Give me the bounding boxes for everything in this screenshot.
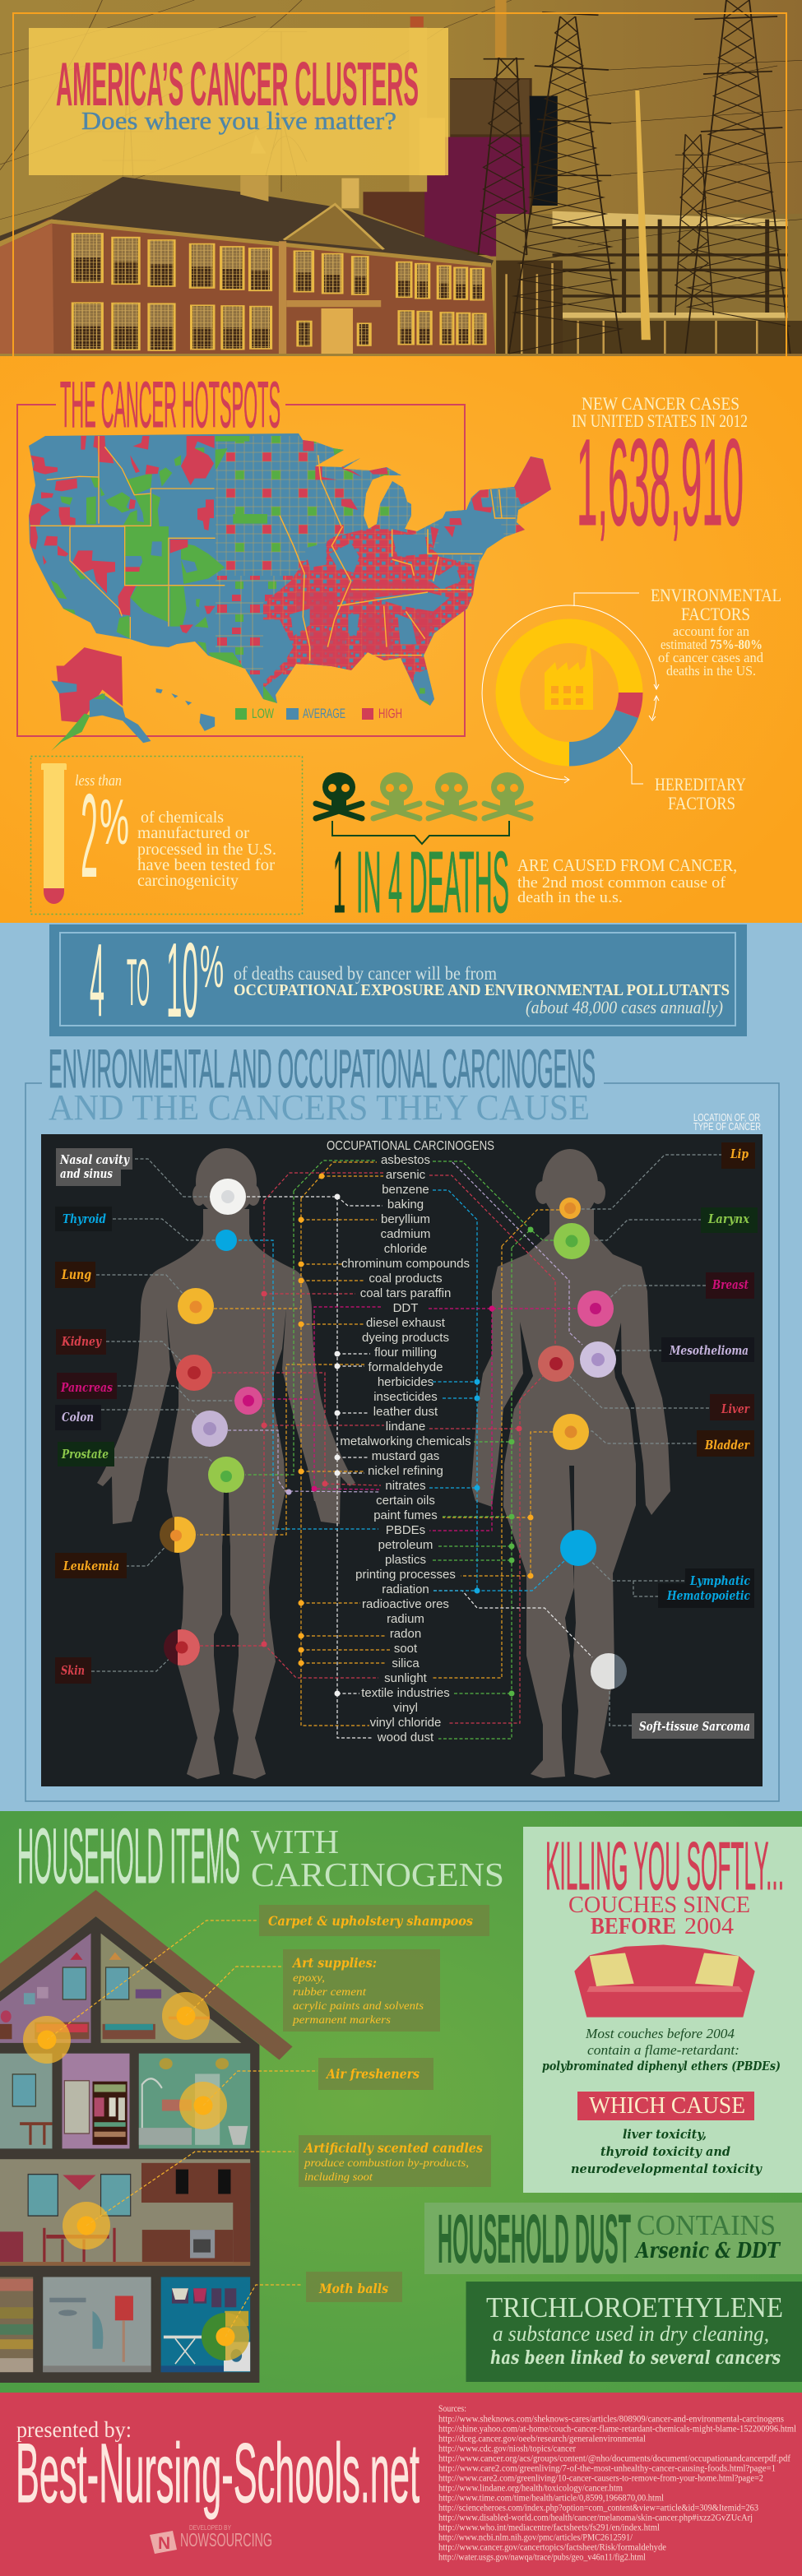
new cancer cases stat: IN UNITED STATES IN 2012: [572, 410, 748, 431]
right cancer labels: Lip: [730, 1147, 749, 1161]
sources list: http://www.care2.com/greenliving/7-of-the-most-unhealthy-cancer-causing-foods.html?page=1: [438, 2463, 776, 2473]
right cancer labels: Soft-tissue Sarcoma: [639, 1719, 750, 1734]
callout: 2% of chemicals tested: less than: [75, 772, 122, 790]
sources list: http://www.cancer.gov/cancertopics/factsheet/Risk/formaldehyde: [438, 2543, 666, 2553]
panel: killing you softly: thyroid toxicity and: [600, 2144, 730, 2159]
callout: 2% of chemicals tested: have been tested for: [137, 856, 275, 874]
1 in 4 deaths: death in the u.s.: [517, 889, 623, 906]
left cancer labels: Skin: [61, 1663, 85, 1678]
occupational carcinogens list: mustard gas: [372, 1449, 439, 1463]
map legend: AVERAGE: [303, 706, 345, 721]
right cancer labels: Breast: [712, 1277, 749, 1292]
icon: light skull: [484, 772, 531, 818]
label: art supplies: acrylic paints and solvents: [293, 2000, 424, 2013]
label: carpet shampoos: [259, 1905, 489, 1936]
panel: killing you softly: contain a flame-retardant:: [587, 2042, 739, 2058]
label: moth balls: Moth balls: [318, 2281, 388, 2296]
east counties: [263, 440, 551, 706]
location label: LOCATION OF, OR: [693, 1111, 760, 1124]
occupational carcinogens list: vinyl chloride: [370, 1716, 441, 1730]
banner: 4 to 10%: 10: [166, 921, 198, 1040]
occupational carcinogens list: lindane: [386, 1420, 425, 1434]
occupational carcinogens list: nitrates: [385, 1479, 426, 1493]
subtitle: Does where you live matter?: [81, 106, 396, 135]
occupational carcinogens list: wood dust: [377, 1730, 434, 1744]
panel: household dust: CONTAINS: [637, 2209, 776, 2241]
first floor: [28, 2175, 58, 2216]
occupational carcinogens list: textile industries: [361, 1686, 450, 1700]
map legend: LOW: [252, 706, 274, 721]
occupational carcinogens list: metalworking chemicals: [340, 1434, 471, 1448]
panel: trichloroethylene: a substance used in dry cleaning,: [493, 2322, 769, 2346]
sources list: http://dceg.cancer.gov/oeeb/research/generalenvironmental: [438, 2434, 646, 2444]
occupational carcinogens list: herbicides: [378, 1375, 433, 1389]
occupational carcinogens list: paint fumes: [373, 1508, 438, 1522]
sources list: Sources:: [438, 2404, 466, 2414]
occupational carcinogens list: coal tars paraffin: [360, 1286, 451, 1300]
environmental factors text: [651, 585, 781, 679]
cancer location circles, male: [160, 1179, 262, 1668]
right cancer labels: Mesothelioma: [669, 1343, 749, 1358]
household heading: CARCINOGENS: [251, 1856, 504, 1893]
title box: [29, 28, 448, 175]
panel: trichloroethylene: TRICHLOROETHYLENE: [486, 2291, 783, 2323]
occupational carcinogens list: silica: [392, 1656, 420, 1670]
map legend: [235, 706, 402, 721]
developer logo: N: [158, 2534, 170, 2553]
callout: 2% of chemicals tested: processed in the U.S.: [137, 841, 276, 859]
occupational carcinogens list: beryllium: [381, 1212, 430, 1226]
occupational carcinogens list: baking: [387, 1198, 424, 1212]
banner: 4 to 10%: 4: [90, 922, 104, 1038]
left cancer labels: Thyroid: [63, 1212, 106, 1226]
panel: killing you softly: WHICH CAUSE: [589, 2092, 745, 2119]
occupational carcinogens list: coal products: [369, 1272, 443, 1286]
left cancer labels: and sinus: [60, 1166, 113, 1181]
right cancer labels: Larynx: [707, 1212, 750, 1226]
occupational carcinogens list: DDT: [393, 1301, 418, 1315]
left cancer labels: [55, 1148, 132, 1684]
section: household items (green): [0, 1811, 802, 2393]
1 in 4 deaths: ARE CAUSED FROM CANCER,: [517, 855, 737, 875]
sources list: http://water.usgs.gov/nawqa/trace/pubs/geo_v46n11/fig2.html: [438, 2553, 646, 2563]
label: art supplies: epoxy,: [293, 1972, 325, 1985]
male figure: [97, 1148, 355, 1779]
icon: dark skull: [316, 772, 362, 818]
occupational carcinogens list: vinyl: [393, 1701, 418, 1715]
occupational carcinogens list: petroleum: [378, 1538, 433, 1552]
callout: 2% of chemicals tested: carcinogenicity: [137, 872, 239, 890]
sources list: http://www.sheknows.com/sheknows-cares/articles/808909/cancer-and-environmental-carcinogens: [438, 2414, 784, 2424]
occupational carcinogens list: diesel exhaust: [366, 1316, 446, 1330]
sources list: http://www.who.int/mediacentre/factsheets/fs291/en/index.html: [438, 2523, 660, 2533]
label: scented candles: Artificially scented candles: [303, 2140, 483, 2156]
1 in 4 deaths: the 2nd most common cause of: [517, 874, 726, 892]
presented by: presented by:: [16, 2417, 132, 2442]
Alaska: [51, 647, 215, 751]
map legend: HIGH: [378, 706, 402, 721]
sources list: http://www.care2.com/greenliving/10-cancer-causers-to-remove-from-your-home.html?page=2: [438, 2474, 763, 2484]
left cancer labels: Kidney: [61, 1334, 102, 1349]
occupational carcinogens list: radon: [390, 1627, 421, 1641]
hero panel: photo collage with title: [0, 0, 802, 367]
section: carcinogens (blue): [0, 921, 802, 1811]
occupational carcinogens list: cadmium: [381, 1227, 430, 1241]
occupational carcinogens list: radiation: [382, 1582, 429, 1596]
1 in 4 deaths: 1: [333, 834, 345, 931]
right cancer labels: Lymphatic: [689, 1573, 750, 1588]
sources list: http://www.ncbi.nlm.nih.gov/pmc/articles/PMC2612591/: [438, 2533, 633, 2543]
developer logo: NOWSOURCING: [180, 2529, 272, 2551]
occupational carcinogens list: radium: [387, 1612, 424, 1626]
pylons: [478, 0, 802, 354]
right cancer labels: Hematopoietic: [666, 1588, 750, 1603]
occupational carcinogens list: leather dust: [373, 1405, 438, 1419]
icon: test tube: [41, 763, 67, 904]
section: footer (red): [0, 2393, 802, 2576]
occupational carcinogens list: soot: [394, 1642, 418, 1656]
label: scented candles: [299, 2135, 491, 2187]
hereditary factors text: HEREDITARY: [655, 774, 746, 795]
icon: light skull: [429, 772, 475, 818]
panel: killing you softly: 2004: [684, 1913, 735, 1939]
developer logo: DEVELOPED BY: [189, 2524, 232, 2532]
US county map: [16, 428, 559, 751]
banner: 4 to 10%: [49, 921, 747, 1040]
label: art supplies: Art supplies:: [291, 1955, 377, 1971]
environmental factors text: FACTORS: [681, 604, 750, 624]
carcinogen connector lines: [91, 1155, 722, 1739]
occupational carcinogens list: sunlight: [384, 1671, 428, 1685]
illustration: house cross-section: [0, 1890, 293, 2383]
1 in 4 deaths: [316, 772, 737, 931]
occupational carcinogens list: insecticides: [373, 1390, 438, 1404]
callout: 2% of chemicals tested: [31, 757, 303, 915]
sources list: http://www.lindane.org/health/toxicology/cancer.htm: [438, 2484, 623, 2494]
cancer location circles, female: [538, 1198, 627, 1691]
callout: 2% of chemicals tested: %: [100, 785, 129, 858]
label: air fresheners: Air fresheners: [325, 2066, 420, 2082]
developer logo: [150, 2524, 272, 2554]
panel: killing you softly: BEFORE: [591, 1913, 676, 1939]
hereditary factors text: [655, 774, 746, 813]
panel: killing you softly: liver toxicity,: [623, 2127, 707, 2142]
environmental factors text: deaths in the US.: [666, 663, 756, 679]
left cancer labels: Pancreas: [60, 1380, 113, 1395]
occupational carcinogens list: benzene: [382, 1183, 429, 1197]
label: carpet shampoos: Carpet & upholstery shampoos: [268, 1913, 473, 1929]
banner: 4 to 10%: %: [200, 934, 224, 1000]
sources list: http://scienceheroes.com/index.php?option=com_content&view=article&id=309&Itemid=263: [438, 2504, 758, 2513]
new cancer cases stat: [572, 393, 748, 551]
new cancer cases stat: NEW CANCER CASES: [582, 393, 739, 414]
panel: killing you softly: [523, 1827, 802, 2193]
callout: 2% of chemicals tested: 2: [81, 769, 98, 902]
environmental factors text: ENVIRONMENTAL: [651, 585, 781, 605]
icon: couch: [574, 1944, 755, 2018]
occupational carcinogens list: printing processes: [355, 1568, 456, 1582]
left cancer labels: Nasal cavity: [59, 1152, 130, 1167]
household heading: WITH: [251, 1823, 339, 1860]
left cancer labels: Lung: [61, 1267, 91, 1282]
occupational carcinogens list: arsenic: [386, 1168, 426, 1182]
which cause box: [577, 2092, 754, 2120]
label: moth balls: [306, 2272, 402, 2302]
household heading: HOUSEHOLD ITEMS: [17, 1813, 240, 1900]
female figure: [471, 1149, 670, 1778]
occupational carcinogens list: radioactive ores: [362, 1597, 449, 1611]
substation: [496, 214, 802, 354]
Hawaii: [156, 688, 215, 731]
section heading: [49, 1039, 596, 1128]
sources list: http://www.cdc.gov/niosh/topics/cancer: [438, 2444, 576, 2453]
section: the cancer hotspots (orange): [0, 356, 802, 931]
attic furniture: [63, 1967, 86, 1999]
household heading: [17, 1813, 504, 1900]
label: scented candles: including soot: [304, 2171, 373, 2184]
carcinogen connector nodes: [262, 1173, 533, 1696]
label: art supplies: rubber cement: [293, 1986, 367, 1999]
environmental factors text: of cancer cases and: [658, 650, 763, 665]
occupational carcinogens list: chloride: [384, 1242, 427, 1256]
sources list: [438, 2404, 796, 2563]
occupational carcinogens list: flour milling: [374, 1346, 437, 1360]
sources list: http://www.time.com/time/health/article/0,8599,1966870,00.html: [438, 2494, 664, 2504]
icon: factory: [545, 646, 593, 710]
label: scented candles: produce combustion by-products,: [304, 2157, 469, 2170]
windows: [72, 234, 485, 350]
occupational carcinogens list: [327, 1139, 494, 1744]
label: art supplies: permanent markers: [292, 2014, 392, 2027]
panel: killing you softly: neurodevelopmental toxicity: [571, 2161, 763, 2176]
occupational carcinogens list: formaldehyde: [369, 1360, 443, 1374]
occupational carcinogens list: certain oils: [376, 1494, 435, 1508]
occupational carcinogens list: asbestos: [381, 1153, 430, 1167]
banner: 4 to 10%: of deaths caused by cancer will be from: [234, 963, 497, 984]
second floor: [12, 2074, 35, 2106]
icon: light skull: [373, 772, 420, 818]
location label: [693, 1111, 761, 1133]
basement: [0, 2279, 33, 2291]
panel: body diagram: [41, 1134, 763, 1786]
school building: [0, 177, 494, 266]
sources list: http://www.disabled-world.com/health/cancer/melanoma/skin-cancer.php#ixzz2GvZUcArj: [438, 2513, 753, 2523]
donut chart: environmental vs hereditary factors: [482, 593, 659, 784]
hero frame: [13, 13, 786, 367]
environmental factors text: estimated 75%-80%: [661, 637, 763, 652]
household leader lines: [47, 1920, 318, 2337]
label: air fresheners: [318, 2058, 433, 2090]
location label: TYPE OF CANCER: [693, 1120, 761, 1133]
occupational carcinogens list: dyeing products: [362, 1331, 449, 1345]
callout: 2% of chemicals tested: manufactured or: [137, 824, 249, 842]
state lines west: [30, 436, 225, 639]
panel: killing you softly: COUCHES SINCE: [568, 1892, 750, 1918]
right cancer labels: [632, 1142, 758, 1739]
occupational carcinogens list: PBDEs: [386, 1523, 425, 1537]
banner: 4 to 10%: (about 48,000 cases annually): [526, 997, 723, 1017]
occupational carcinogens list: nickel refining: [368, 1464, 443, 1478]
banner: 4 to 10%: OCCUPATIONAL EXPOSURE AND ENVIRONMENTAL POLLUTANTS: [234, 981, 730, 999]
environmental factors text: account for an: [673, 623, 749, 639]
banner: 4 to 10%: TO: [127, 946, 150, 1020]
left cancer labels: Colon: [62, 1410, 94, 1425]
right cancer labels: Liver: [721, 1402, 750, 1416]
hero photo: power plant, pylons and school building: [0, 0, 802, 354]
left cancer labels: Leukemia: [63, 1559, 119, 1573]
section heading: AND THE CANCERS THEY CAUSE: [49, 1087, 590, 1128]
callout: 2% of chemicals tested: of chemicals: [141, 808, 224, 827]
right cancer labels: Bladder: [704, 1438, 750, 1452]
label: art supplies: [283, 1949, 440, 2032]
occupational carcinogens list: plastics: [385, 1553, 426, 1567]
occupational carcinogens list: OCCUPATIONAL CARCINOGENS: [327, 1139, 494, 1153]
candle highlight circles: [23, 1992, 249, 2361]
left cancer labels: Prostate: [61, 1447, 109, 1462]
hereditary factors text: FACTORS: [668, 793, 735, 813]
occupational carcinogens list: chrominum compounds: [341, 1257, 470, 1271]
panel: killing you softly: Most couches before 2004: [585, 2026, 735, 2041]
west counties: [29, 436, 267, 674]
panel: trichloroethylene: [466, 2282, 802, 2382]
